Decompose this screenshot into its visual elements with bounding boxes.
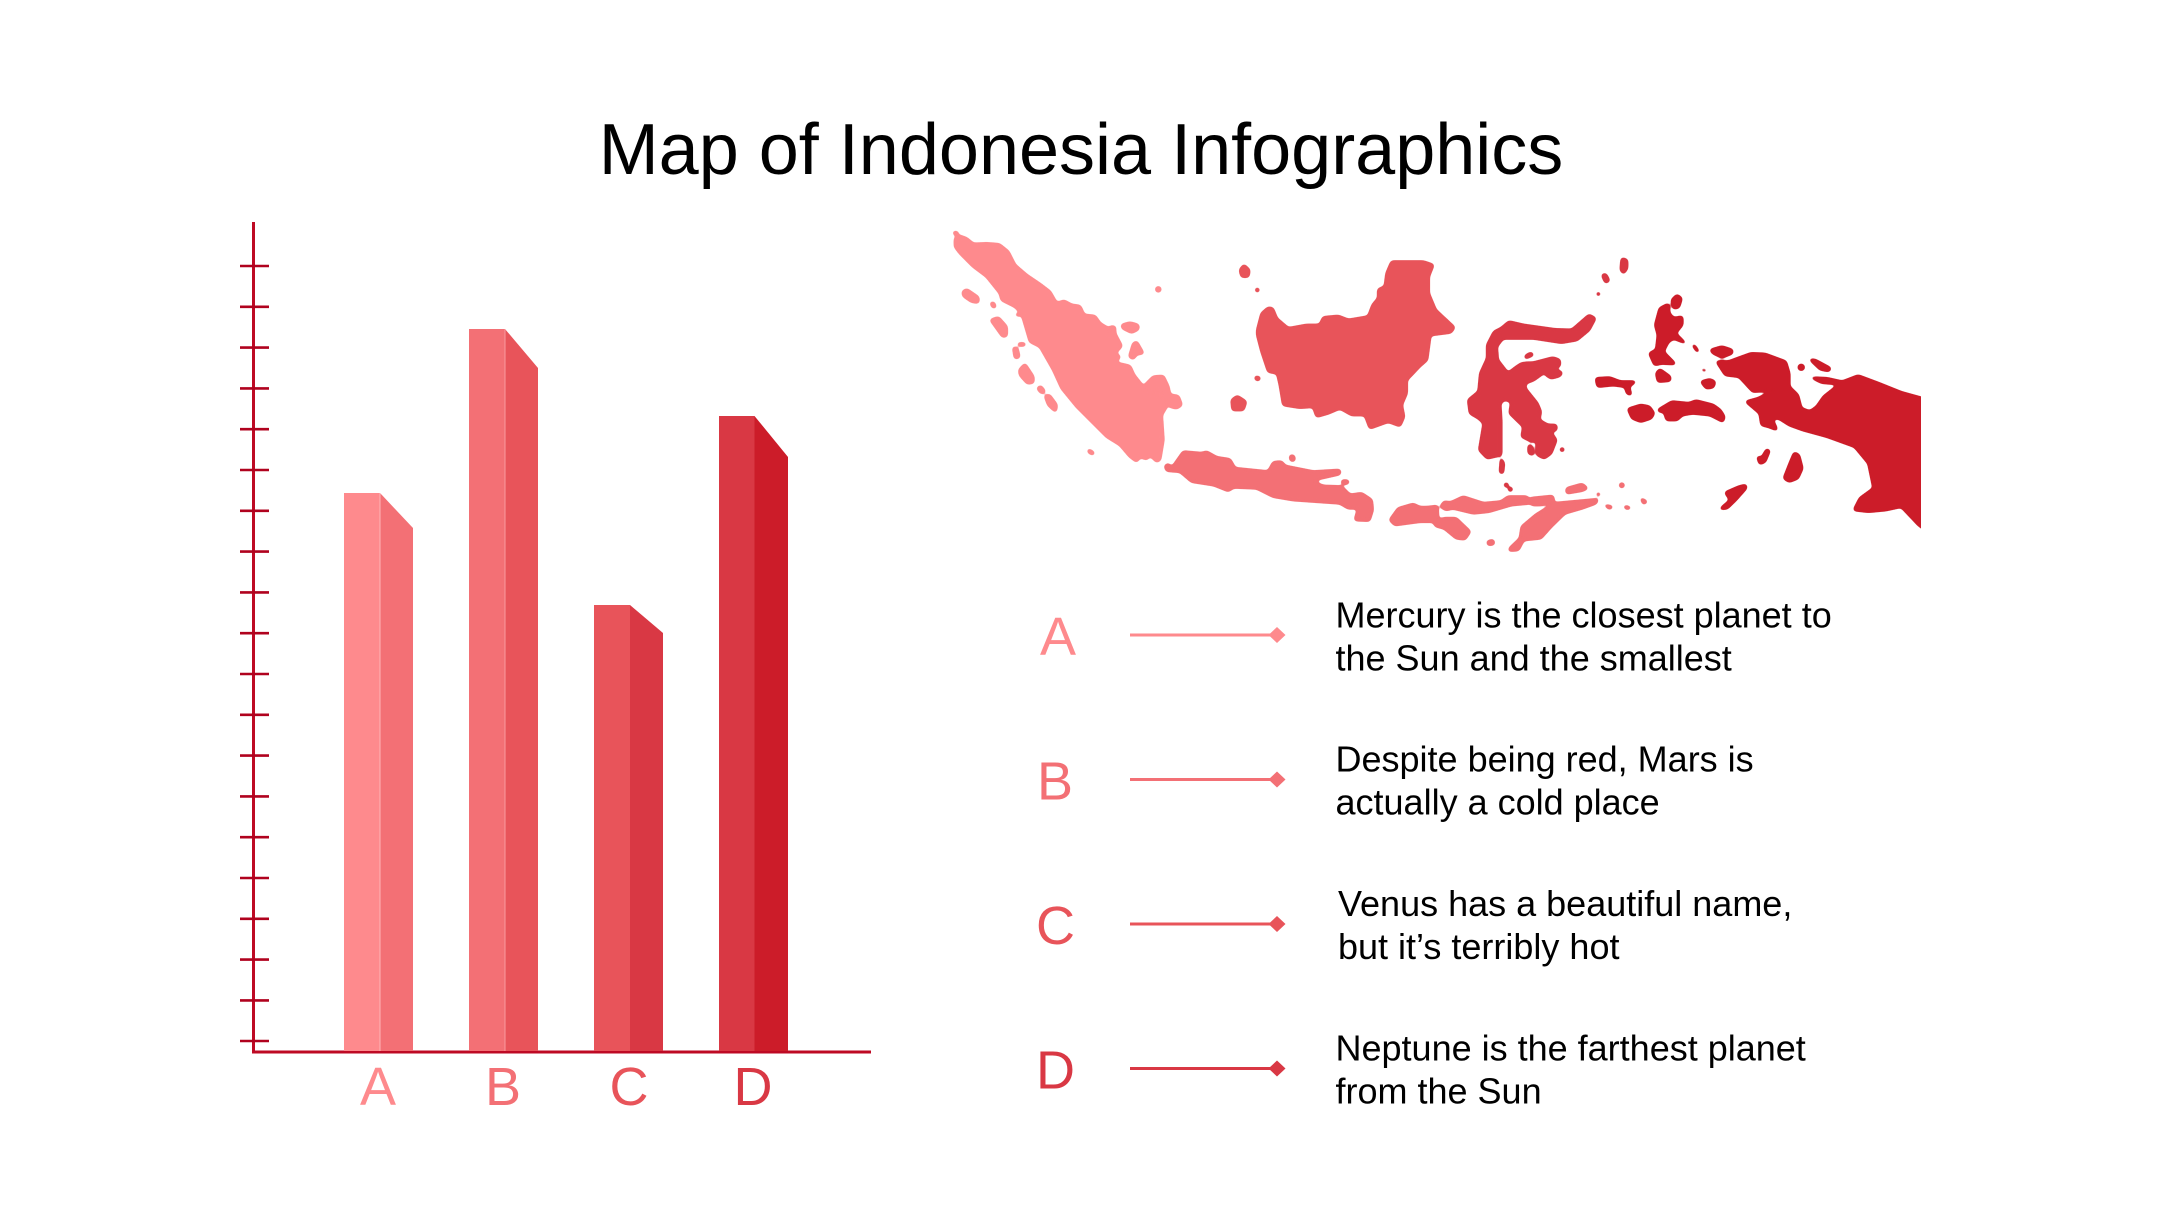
description A: Mercury is the closest planet to xyxy=(1336,594,1832,636)
description A: the Sun and the smallest xyxy=(1336,638,1732,678)
connector arrow C xyxy=(1130,916,1286,932)
letter A: A xyxy=(1040,607,1076,667)
description B: actually a cold place xyxy=(1336,782,1660,822)
description C: but it’s terribly hot xyxy=(1338,926,1619,967)
map of Indonesia xyxy=(953,232,1929,551)
region B: Java and Lesser Sunda Islands xyxy=(1165,452,1647,551)
connector arrow D xyxy=(1130,1060,1286,1076)
bar D xyxy=(719,416,788,1051)
bar A xyxy=(344,493,413,1051)
bar label A: A xyxy=(360,1057,396,1117)
description D: Neptune is the farthest planet xyxy=(1336,1028,1806,1068)
description C: Venus has a beautiful name, xyxy=(1338,883,1792,924)
legend item A xyxy=(1040,594,1832,678)
bar label B: B xyxy=(485,1057,521,1117)
title: Map of Indonesia Infographics xyxy=(599,110,1563,190)
bar C xyxy=(594,605,663,1051)
bar label D: D xyxy=(734,1057,772,1117)
letter B: B xyxy=(1037,752,1073,812)
connector arrow B xyxy=(1130,772,1286,788)
region D: Maluku and Papua xyxy=(1596,295,1929,533)
letter C: C xyxy=(1036,896,1075,956)
description B: Despite being red, Mars is xyxy=(1336,738,1754,780)
legend item B xyxy=(1037,738,1754,822)
legend item C xyxy=(1036,883,1792,967)
chart axes with tick marks xyxy=(240,222,871,1052)
bar B xyxy=(469,329,538,1051)
letter D: D xyxy=(1036,1040,1075,1100)
description D: from the Sun xyxy=(1336,1070,1542,1112)
region C: Kalimantan xyxy=(1232,262,1454,428)
bar chart xyxy=(240,222,871,1117)
legend item D xyxy=(1036,1028,1806,1112)
region A: Sumatra xyxy=(953,232,1182,462)
region C: Sulawesi xyxy=(1468,258,1627,491)
connector arrow A xyxy=(1130,627,1286,643)
bar label C: C xyxy=(610,1057,648,1117)
